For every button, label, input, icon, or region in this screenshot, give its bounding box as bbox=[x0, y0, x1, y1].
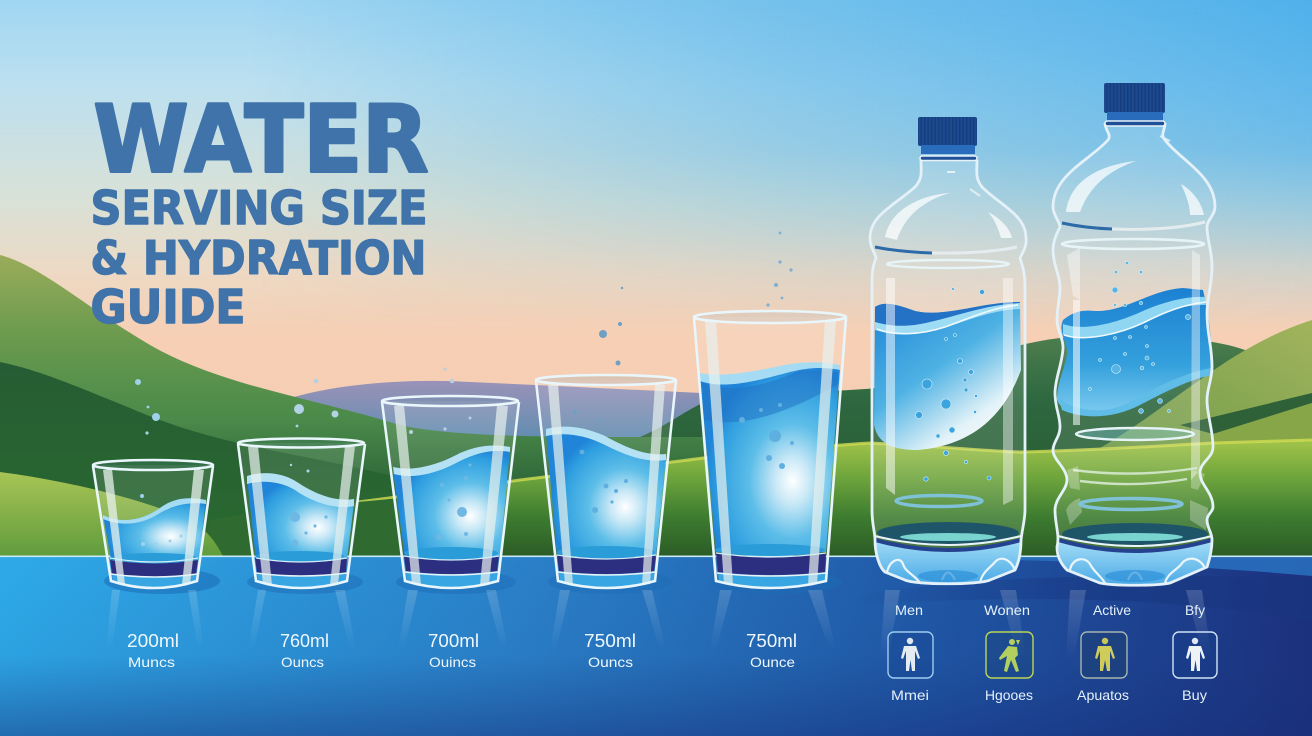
label 5 bbox=[746, 631, 797, 670]
audience: buy bbox=[1173, 602, 1217, 703]
bottle base bbox=[1062, 523, 1208, 545]
bottle body bbox=[870, 160, 1026, 584]
audience: women: Wonen bbox=[984, 602, 1030, 618]
label 2: 760ml bbox=[280, 631, 329, 651]
audience: buy: Bfy bbox=[1185, 602, 1205, 618]
bottle body bbox=[1053, 123, 1215, 585]
label 3: Ouincs bbox=[429, 654, 476, 670]
glass 2: 760ml bbox=[238, 379, 365, 594]
bottle outline bbox=[1053, 123, 1215, 585]
label 1 bbox=[127, 631, 179, 670]
title: guide: GUIDE bbox=[90, 280, 246, 334]
label 2: Ouncs bbox=[281, 654, 324, 670]
table reflections bbox=[106, 590, 1212, 660]
label 4: Ouncs bbox=[588, 654, 633, 670]
audience: active: Apuatos bbox=[1077, 687, 1129, 703]
bottle highlights bbox=[886, 278, 895, 495]
label 3 bbox=[428, 631, 479, 670]
label 2 bbox=[280, 631, 329, 670]
label 4 bbox=[584, 631, 636, 670]
audience: men: Men bbox=[895, 602, 923, 618]
bottle bubbles bbox=[916, 288, 991, 481]
title bbox=[90, 86, 428, 334]
audience: men bbox=[888, 602, 933, 703]
glass 5: 750ml bbox=[694, 232, 846, 594]
title: hydration: & HYDRATION bbox=[90, 231, 426, 285]
serving labels bbox=[127, 631, 797, 670]
title: serving size: SERVING SIZE bbox=[90, 181, 428, 235]
glass 4: 750ml bbox=[536, 287, 676, 594]
title: water: WATER bbox=[94, 86, 428, 194]
glass 1: 200ml bbox=[93, 379, 220, 594]
label 5: Ounce bbox=[750, 654, 795, 670]
icon: woman bbox=[986, 632, 1033, 678]
icon: man bbox=[888, 632, 933, 678]
bottle cap bbox=[1104, 83, 1165, 126]
label 3: 700ml bbox=[428, 631, 479, 651]
table surface bbox=[0, 556, 1312, 736]
bottle water bbox=[874, 302, 1021, 450]
audience: women bbox=[984, 602, 1033, 703]
bottle water bbox=[1057, 288, 1212, 415]
bottle 1 bbox=[870, 117, 1026, 584]
label 4: 750ml bbox=[584, 631, 636, 651]
audience: active bbox=[1077, 602, 1131, 703]
audience: buy: Buy bbox=[1182, 687, 1207, 703]
icon: person bbox=[1173, 632, 1217, 678]
audience: women: Hgooes bbox=[985, 687, 1033, 703]
bottle bubbles bbox=[1089, 261, 1191, 413]
bottle outline bbox=[870, 160, 1026, 584]
bottle base bbox=[877, 522, 1019, 544]
audience: active: Active bbox=[1093, 602, 1131, 618]
bottle highlights bbox=[1067, 248, 1080, 300]
label 5: 750ml bbox=[746, 631, 797, 651]
audience: men: Mmei bbox=[891, 687, 929, 703]
bottle 2 bbox=[1053, 83, 1215, 585]
bottle cap bbox=[918, 117, 977, 160]
icon: active person bbox=[1081, 632, 1127, 678]
background sky bbox=[0, 0, 1312, 397]
label 1: Muncs bbox=[128, 654, 175, 670]
landscape hills bbox=[0, 255, 1312, 560]
glass 3: 700ml bbox=[382, 367, 519, 594]
label 1: 200ml bbox=[127, 631, 179, 651]
